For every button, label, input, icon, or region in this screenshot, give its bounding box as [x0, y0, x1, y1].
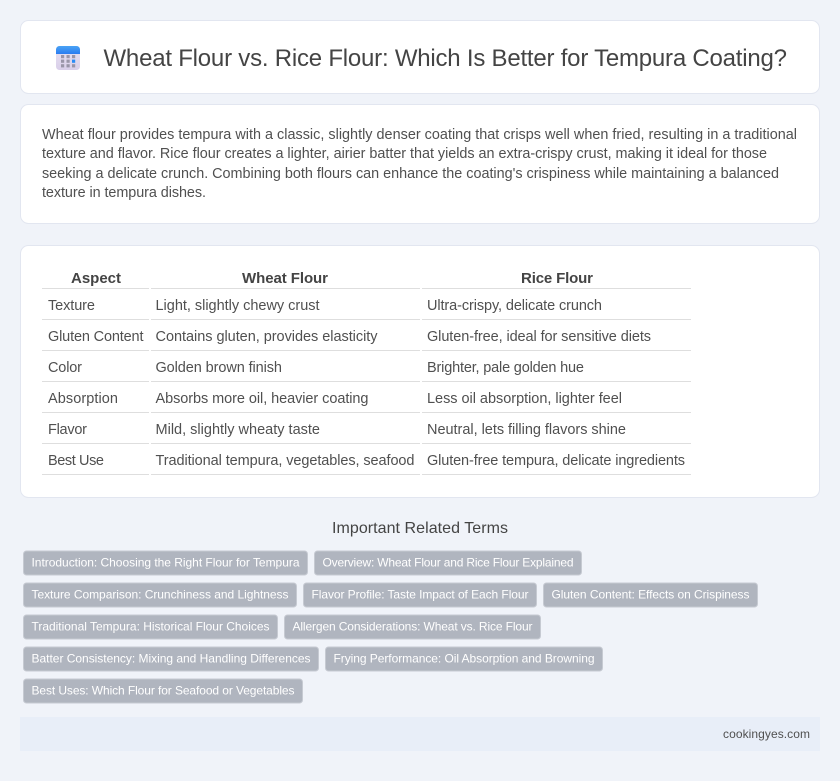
panel: comparison table [20, 246, 820, 498]
tag: batter consistency [24, 647, 318, 671]
table row: flavor: Neutral, lets filling flavors shine [427, 422, 626, 438]
title: Wheat Flour vs. Rice Flour: Which Is Better for Tempura Coating? [104, 45, 787, 72]
table row: color: Brighter, pale golden hue [427, 360, 584, 376]
tag: frying performance: Frying Performance: Oil Absorption and Browning [334, 652, 594, 666]
panel: title header [20, 20, 820, 94]
table row: texture [42, 298, 691, 320]
table row: absorption: Less oil absorption, lighter feel [427, 391, 622, 407]
tag: flavor profile [304, 583, 536, 607]
panel: intro paragraph [20, 104, 820, 224]
panel: intro paragraph: seeking a delicate crunch. Combining both flours can enhance the coating's crispiness while maintaining a balanced [42, 166, 779, 182]
table row: color [42, 360, 691, 382]
table header row: Wheat Flour [242, 270, 328, 287]
tag: texture comparison: Texture Comparison: Crunchiness and Lightness [32, 588, 288, 602]
tag: best uses [24, 679, 302, 703]
table row: flavor [42, 422, 691, 444]
tag: best uses: Best Uses: Which Flour for Seafood or Vegetables [32, 684, 294, 698]
panel: intro paragraph: texture in tempura dishes. [42, 185, 206, 201]
table row: gluten content: Gluten-free, ideal for sensitive diets [427, 329, 651, 345]
table row: absorption: Absorption [48, 391, 118, 407]
tag: gluten content: Gluten Content: Effects on Crispiness [552, 588, 750, 602]
table row: texture: Ultra-crispy, delicate crunch [427, 298, 602, 314]
tag: introduction: Introduction: Choosing the Right Flour for Tempura [32, 556, 300, 570]
table row: texture: Light, slightly chewy crust [156, 298, 320, 314]
footer: cookingyes.com [723, 727, 810, 741]
table row: best use: Gluten-free tempura, delicate ingredients [427, 453, 685, 469]
tag: traditional tempura: Traditional Tempura: Historical Flour Choices [32, 620, 270, 634]
table row: best use: Best Use [48, 453, 104, 469]
table header row: Rice Flour [521, 270, 593, 287]
tag: allergen considerations: Allergen Considerations: Wheat vs. Rice Flour [292, 620, 532, 634]
table row: flavor: Mild, slightly wheaty taste [156, 422, 320, 438]
heading: important related terms: Important Related Terms [332, 520, 508, 537]
table row: best use [42, 453, 691, 474]
panel: intro paragraph: texture and flavor. Rice flour creates a lighter, airier batter that yields an extra-crispy crust, making it ideal for those [42, 146, 767, 162]
table row: texture: Texture [48, 298, 95, 314]
tag: flavor profile: Flavor Profile: Taste Impact of Each Flour [312, 588, 528, 602]
table row: color: Golden brown finish [156, 360, 282, 376]
table row: color: Color [48, 360, 82, 376]
tag: traditional tempura [24, 615, 278, 639]
tag: overview: Overview: Wheat Flour and Rice Flour Explained [322, 556, 574, 570]
tag: allergen considerations [284, 615, 540, 639]
tag: gluten content [544, 583, 758, 607]
table row: gluten content [42, 329, 691, 350]
table row: gluten content: Gluten Content [48, 329, 144, 345]
table row: best use: Traditional tempura, vegetables, seafood [156, 453, 414, 469]
table row: absorption [42, 391, 691, 412]
tag: batter consistency: Batter Consistency: Mixing and Handling Differences [32, 652, 310, 666]
tag: introduction [24, 551, 308, 575]
panel: intro paragraph: Wheat flour provides tempura with a classic, slightly denser coating that crisps well when fried, resulting in a traditional [42, 127, 797, 143]
footer [20, 717, 820, 751]
tag: frying performance [326, 647, 602, 671]
icon: calendar [56, 46, 80, 70]
tag: texture comparison [24, 583, 296, 607]
table row: gluten content: Contains gluten, provides elasticity [156, 329, 378, 345]
panel: related term tags [24, 551, 758, 703]
table header row [42, 270, 691, 288]
tag: overview [314, 551, 582, 575]
table header row: Aspect [71, 270, 121, 287]
table row: flavor: Flavor [48, 422, 87, 438]
table row: absorption: Absorbs more oil, heavier coating [156, 391, 368, 407]
